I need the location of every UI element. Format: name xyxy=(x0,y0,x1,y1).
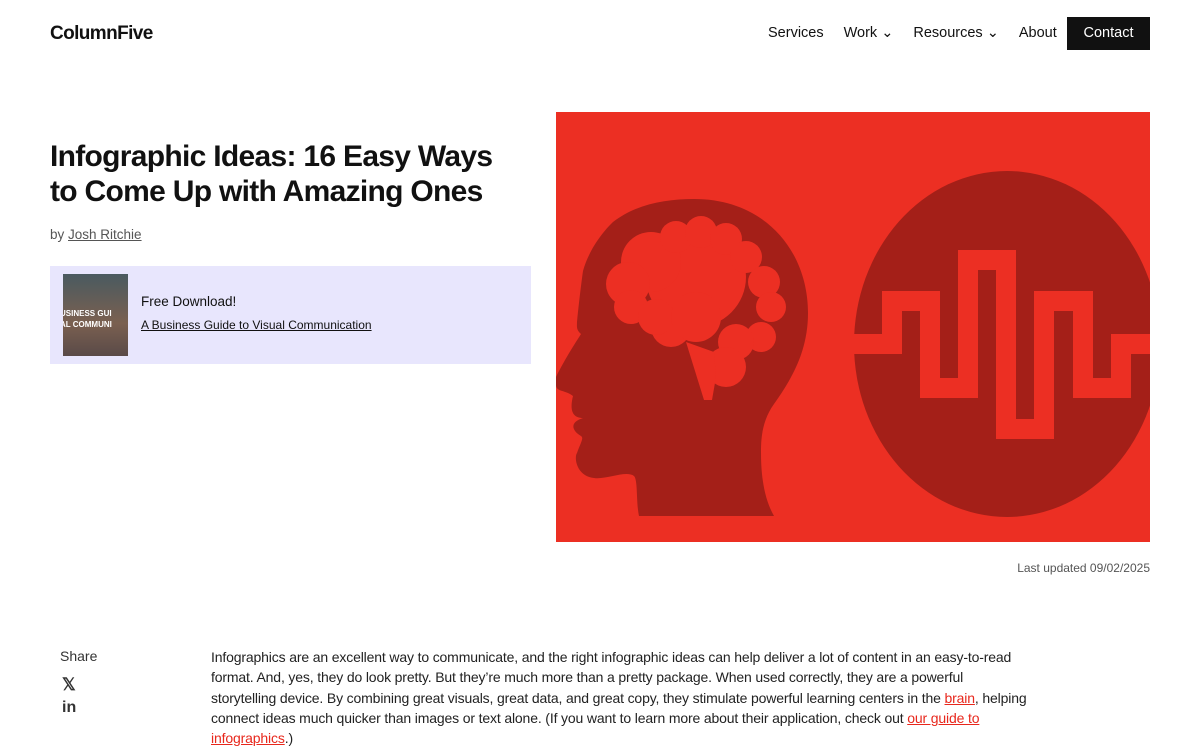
callout text: Free Download! xyxy=(141,294,236,309)
icon: head with brain xyxy=(556,199,808,516)
share sidebar xyxy=(60,648,97,716)
navigation: Work ⌄ xyxy=(844,25,893,41)
logo: ColumnFive xyxy=(50,23,153,44)
book thumbnail xyxy=(63,274,128,356)
share sidebar: Share xyxy=(60,648,97,664)
intro paragraph xyxy=(211,649,1026,746)
intro paragraph: connect ideas much quicker than images or text alone. (If you want to learn more about their application, check out our guide to xyxy=(211,710,979,726)
intro paragraph: format. And, yes, they do look pretty. But they’re much more than a pretty package. When used correctly, they are a powerful xyxy=(211,669,963,685)
intro paragraph: Infographics are an excellent way to communicate, and the right infographic ideas can help deliver a lot of content in an easy-to-read xyxy=(211,649,1011,665)
contact button: Contact xyxy=(1084,25,1133,41)
navigation: About xyxy=(1019,25,1057,41)
icon: linkedin: in xyxy=(62,699,76,716)
navigation: Services xyxy=(768,25,824,41)
byline: by Josh Ritchie xyxy=(50,227,142,242)
hero illustration xyxy=(556,112,1150,542)
download callout: A Business Guide to Visual Communication xyxy=(141,318,372,332)
download callout xyxy=(50,266,531,364)
intro paragraph: infographics.) xyxy=(211,730,293,746)
contact button xyxy=(1067,17,1150,50)
last updated: Last updated 09/02/2025 xyxy=(1017,561,1150,575)
navigation: Resources ⌄ xyxy=(913,25,999,41)
icon: sound wave circle xyxy=(854,171,1160,517)
title: Infographic Ideas: 16 Easy Ways to Come Up with Amazing Ones xyxy=(50,140,492,208)
intro paragraph: storytelling device. By combining great visuals, great data, and great copy, they stimulate powerful learning centers in the brain, helping xyxy=(211,690,1026,706)
navigation xyxy=(768,25,1057,41)
icon: X: 𝕏 xyxy=(62,675,76,694)
